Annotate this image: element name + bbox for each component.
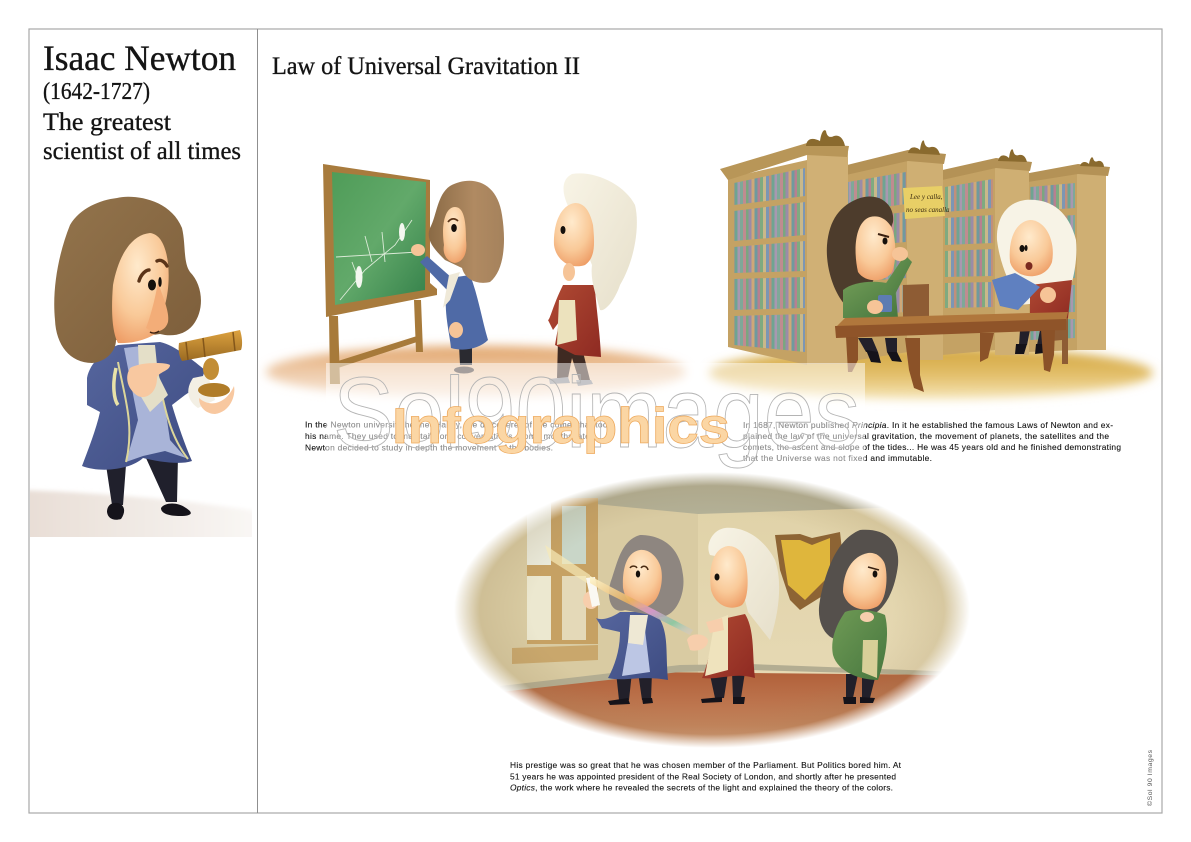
- left person: eye: [882, 238, 888, 244]
- Newton: coat: [446, 275, 488, 350]
- sign text: Lee y calla,: [909, 193, 943, 201]
- cornice: [938, 158, 1032, 180]
- caption 3: His prestige was so great that he was chosen member of the Parliament. But Politics bored him. At: [510, 760, 902, 770]
- window frame: [527, 498, 598, 644]
- coat: [82, 342, 205, 470]
- window panes: [562, 506, 586, 564]
- blackboard surface: [332, 172, 426, 305]
- side: [995, 165, 1029, 355]
- floor: [266, 346, 686, 398]
- watermark outline text: Sol90images: [333, 357, 860, 469]
- blackboard legs: [329, 300, 423, 384]
- mouth: [150, 331, 159, 333]
- caption 1: Newton decided to study in depth the movement of the bodies.: [305, 442, 553, 452]
- Newton: eye: [451, 224, 457, 232]
- coat trim: [118, 352, 188, 462]
- rainbow beam: [590, 576, 693, 635]
- left person: legs: [858, 338, 897, 352]
- front: [846, 157, 908, 362]
- cornice band: [574, 476, 876, 514]
- caption 3: Optics, the work where he revealed the secrets of the light and explained the theory of the colors.: [510, 782, 893, 792]
- Halley: shoes: [701, 697, 745, 704]
- third man: coat: [832, 610, 887, 680]
- caption 2: comets, the ascent and slope of the tides... He was 45 years old and he finished demonstrating: [743, 442, 1121, 452]
- Halley: legs: [557, 340, 590, 380]
- window panes: [527, 576, 551, 640]
- scene 1: blackboard with Halley: [266, 164, 686, 398]
- subtitle line 2: scientist of all times: [43, 136, 241, 165]
- Halley: waistcoat: [557, 300, 577, 345]
- caption 2: In 1687, Newton published Principia. In it he established the famous Laws of Newton and ex-: [743, 420, 1113, 430]
- lace jabot: [138, 345, 168, 412]
- subtitle line 1: The greatest: [43, 107, 171, 136]
- mug: [878, 295, 892, 312]
- third man: eye: [873, 570, 877, 578]
- caption 1: In the Newton university he met Halley, the discoverer of the comet that took: [305, 420, 613, 430]
- baseboard: [500, 664, 960, 692]
- Newton: brow: [630, 566, 648, 570]
- right person: coat: [1030, 280, 1072, 320]
- blackboard frame: [323, 164, 437, 317]
- Halley: coat: [702, 614, 755, 678]
- left person: face: [856, 216, 895, 280]
- Halley: legs: [710, 672, 745, 698]
- Newton: shoes: [454, 366, 474, 374]
- Halley: shoes: [549, 377, 593, 386]
- front: [942, 167, 996, 355]
- cornice: [843, 150, 946, 175]
- books: [945, 179, 993, 308]
- Newton: eye: [636, 570, 640, 578]
- left person: arm: [880, 255, 912, 300]
- table: [835, 312, 1068, 392]
- room: [450, 470, 980, 760]
- third man: face: [843, 553, 886, 610]
- chalk planets: [399, 223, 405, 241]
- third man: waistcoat: [862, 640, 878, 678]
- right person: eyes: [1020, 245, 1028, 252]
- scene 2: library: [709, 130, 1153, 399]
- telescope base: [198, 383, 230, 397]
- Newton: face: [443, 207, 466, 263]
- name: Isaac Newton: [43, 38, 236, 78]
- Newton: face: [623, 550, 662, 608]
- Newton: coat: [596, 612, 668, 680]
- Halley: face: [710, 546, 748, 608]
- floor: [709, 347, 1153, 399]
- window panes: [527, 503, 551, 565]
- sidebar divider: [256, 29, 258, 813]
- light beam: [545, 545, 590, 585]
- bookcase 4: [1024, 157, 1110, 352]
- Halley: eye: [714, 574, 720, 580]
- left person: coat: [843, 282, 898, 318]
- Halley: wig: [564, 173, 637, 310]
- table edge: [835, 319, 1066, 338]
- side: [1077, 172, 1106, 350]
- front: [728, 160, 807, 365]
- Newton: hand with prism: [583, 591, 599, 609]
- scene 3: Royal Society room: [450, 470, 980, 760]
- Newton: cravat: [443, 272, 460, 308]
- right person: face: [1010, 220, 1053, 276]
- Newton: legs: [459, 345, 472, 365]
- left person: hand at brow: [892, 247, 908, 261]
- side: [907, 156, 943, 360]
- crest: [1080, 157, 1104, 167]
- cornice: [720, 143, 849, 180]
- crest: [908, 140, 940, 155]
- book: [992, 273, 1040, 310]
- telescope tube: [179, 330, 242, 361]
- sign board: [903, 186, 945, 219]
- books: [848, 172, 906, 316]
- Newton: shoes: [608, 698, 653, 705]
- chalk equations: [336, 220, 418, 300]
- third man: hair: [819, 530, 898, 640]
- right chair: [1040, 318, 1068, 364]
- third man: brow: [868, 567, 879, 570]
- shoes: [107, 503, 191, 520]
- image credit: ©Sol 90 Images: [1146, 749, 1154, 806]
- Newton: vest: [622, 630, 650, 676]
- front: [1028, 172, 1078, 352]
- chalk comet: [356, 266, 362, 288]
- edge vignette: [467, 481, 959, 736]
- watermark orange text: Infographics: [392, 398, 730, 454]
- crest: [806, 130, 845, 146]
- Newton: jabot: [628, 615, 648, 645]
- Halley: wig: [708, 528, 779, 640]
- vest: [124, 345, 186, 462]
- Newton: hair: [609, 535, 683, 617]
- bookcase 2: [843, 140, 946, 362]
- crest: [998, 149, 1027, 162]
- watermark panel: [326, 363, 865, 470]
- bookcase 1: [720, 130, 849, 365]
- left person: shoes: [866, 350, 902, 363]
- Halley: hands: [687, 618, 724, 651]
- telescope stand: [203, 358, 219, 380]
- floor: [506, 672, 936, 747]
- books: [734, 168, 805, 352]
- Newton: brow: [448, 219, 458, 222]
- Halley: eye: [560, 226, 566, 234]
- hair: [54, 197, 201, 363]
- open hand: [199, 386, 234, 414]
- right arm cuff: [188, 375, 215, 408]
- nose: [146, 282, 168, 331]
- plaque: [775, 532, 842, 610]
- left person: hair: [827, 197, 893, 315]
- window panes: [562, 576, 586, 640]
- plaque shield: [781, 538, 830, 600]
- sign: [903, 186, 950, 219]
- Newton: hand: [411, 244, 425, 256]
- right eye: [158, 277, 162, 287]
- caption 2: that the Universe was not fixed and immutable.: [743, 453, 932, 463]
- window sill: [512, 645, 598, 664]
- caption 1: his name. They used to maintain long conversations. Some months later,: [305, 431, 595, 441]
- third man: legs: [846, 674, 876, 698]
- dates: (1642-1727): [43, 78, 150, 105]
- chair: [903, 284, 929, 318]
- cornice: [1024, 164, 1110, 182]
- right person: legs: [1019, 330, 1047, 345]
- sidebar heading: [43, 38, 241, 165]
- Newton: hand on hip: [449, 322, 463, 338]
- Halley: coat: [548, 285, 601, 357]
- right person: hand: [1040, 287, 1056, 303]
- left eye: [148, 280, 156, 290]
- right person: shoes: [1015, 344, 1046, 354]
- Newton: arm: [420, 256, 452, 290]
- Halley: face: [554, 203, 594, 266]
- Halley: waistcoat: [705, 615, 728, 676]
- plaque frame: [775, 532, 842, 610]
- bookcase 3: [938, 149, 1032, 355]
- left person: brow: [878, 234, 889, 237]
- illustration: Newton with telescope: [30, 196, 252, 537]
- floor shadow: [30, 488, 252, 537]
- face: [112, 233, 169, 343]
- wall: [698, 508, 966, 674]
- third man: shoes: [843, 697, 875, 704]
- hand pointing: [127, 363, 170, 397]
- third man: hand: [860, 612, 874, 622]
- cuff trim: [114, 368, 118, 405]
- left wall shade: [472, 524, 698, 686]
- table top: [835, 312, 1068, 328]
- books: [1030, 183, 1075, 340]
- brows: [139, 260, 167, 281]
- Newton: hair: [429, 181, 504, 283]
- legs: [106, 456, 178, 505]
- right person: wig: [997, 200, 1076, 305]
- right person: mouth: [1026, 262, 1032, 270]
- table legs: [846, 330, 1055, 392]
- caption 2: plained the law of the universal gravitation, the movement of planets, the satellites and the: [743, 431, 1109, 441]
- sign text: no seas canalla: [906, 206, 950, 214]
- telescope bands: [186, 332, 235, 360]
- left person: hand on mug: [867, 300, 883, 314]
- Newton: legs: [616, 672, 652, 700]
- side: [807, 152, 848, 364]
- prism: [586, 577, 600, 607]
- Halley: hand on chin: [563, 263, 575, 281]
- caption 3: 51 years he was appointed president of the Real Society of London, and shortly after he presented: [510, 772, 896, 782]
- back table leg: [980, 333, 994, 362]
- main title: Law of Universal Gravitation II: [272, 51, 580, 80]
